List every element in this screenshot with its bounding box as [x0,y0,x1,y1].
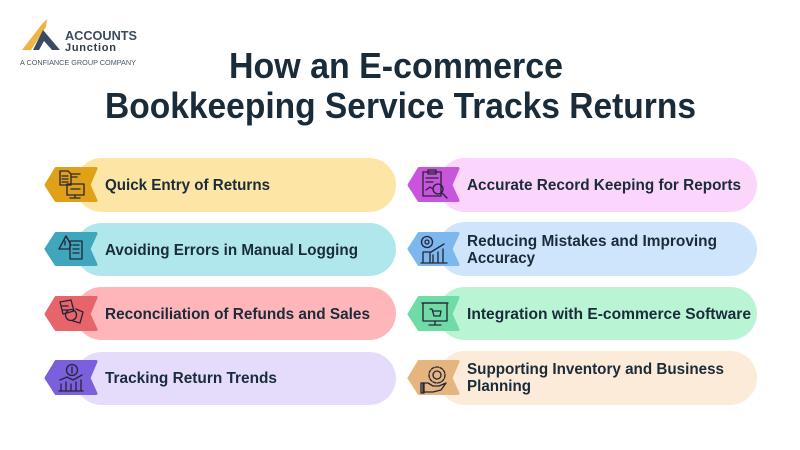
icon: gear and rising bars [421,236,447,263]
panel: Tracking Return Trends [46,352,396,405]
title: How an E-commerce [229,45,563,86]
tag [46,168,96,200]
panel: Integration with E-commerce Software [409,287,757,340]
label: Accuracy [467,250,535,267]
tag [409,362,458,394]
tag [409,168,458,200]
panel: Reconciliation of Refunds and Sales [46,287,396,340]
icon: warning and checklist [59,236,82,259]
label: Supporting Inventory and Business [467,361,724,378]
icon: reconciliation documents [60,300,83,323]
logo: Accounts Junction [20,19,137,67]
icon: clipboard and magnifier [423,170,447,198]
label [467,233,717,267]
title [105,45,696,126]
panel: Reducing Mistakes and Improving Accuracy [409,222,757,276]
label: Reconciliation of Refunds and Sales [105,306,370,323]
logo subword: Junction [65,42,116,54]
label: Planning [467,378,531,395]
label: Accurate Record Keeping for Reports [467,177,741,194]
label [467,361,724,395]
icon: storefront monitor [422,303,448,325]
tag [46,234,96,264]
logo mark [22,19,60,50]
logo tagline: A CONFIANCE GROUP COMPANY [20,60,136,67]
label: Tracking Return Trends [105,370,277,387]
label: Integration with E-commerce Software [467,306,751,323]
title: Bookkeeping Service Tracks Returns [105,85,696,126]
panel: Quick Entry of Returns [46,158,396,212]
panel: Accurate Record Keeping for Reports [409,158,757,212]
label: Reducing Mistakes and Improving [467,233,717,250]
panel: Avoiding Errors in Manual Logging [46,223,396,276]
label: Avoiding Errors in Manual Logging [105,242,358,259]
icon: hand holding gear [421,367,446,393]
tag [409,234,458,264]
panel: Supporting Inventory and Business Planning [409,351,757,405]
tag [46,298,96,330]
tag [409,298,458,330]
icon: coin and bar chart [59,364,83,391]
logo wordmark: ACCOUNTS [65,28,137,43]
icon: documents and monitor [60,171,84,198]
label: Quick Entry of Returns [105,177,270,194]
tag [46,362,96,394]
